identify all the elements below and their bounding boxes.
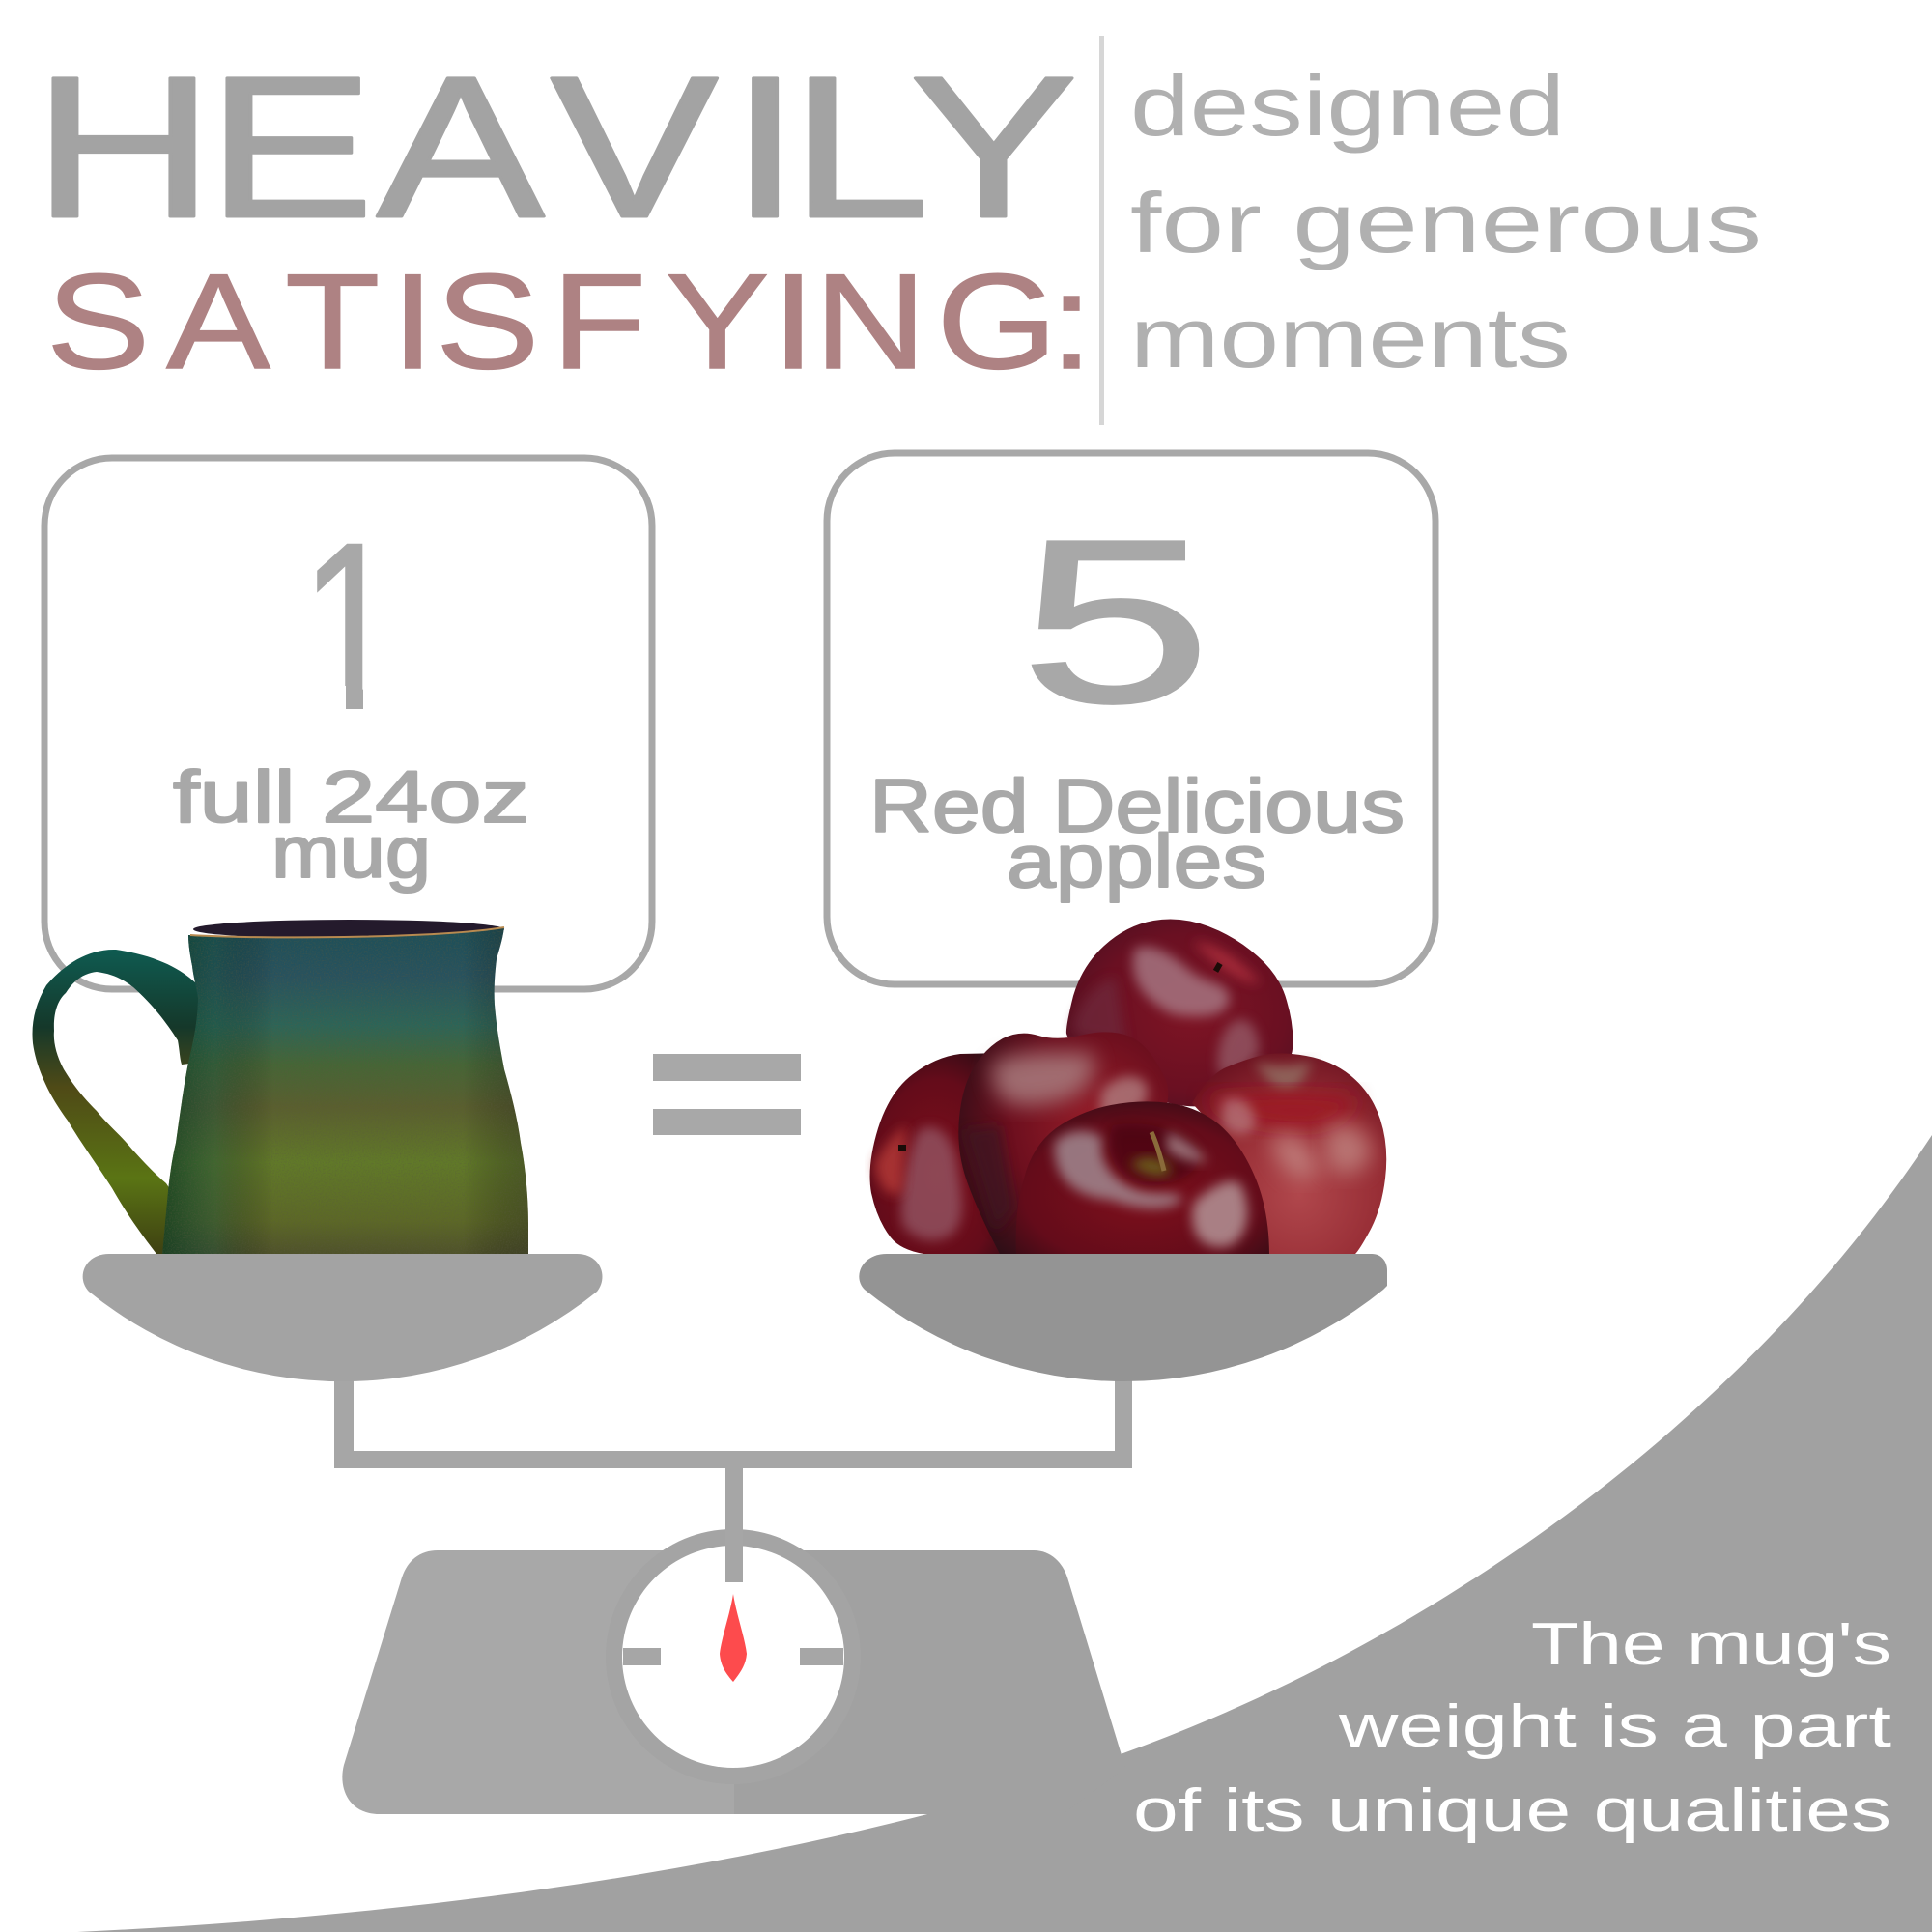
needle: [720, 1594, 747, 1682]
apple: front: [1016, 1101, 1269, 1256]
right pan: [859, 1254, 1387, 1381]
label: full 24oz mug: full 24oz: [173, 756, 529, 838]
caption: weight is a part: [1338, 1693, 1891, 1760]
title: SATISFYING: SATISFYING:: [46, 245, 1093, 397]
label: Red Delicious apples: [869, 763, 1405, 903]
dial: [606, 1468, 861, 1784]
scale: [83, 1254, 1387, 1814]
mug rim edge: [190, 927, 504, 937]
apple: back: [1066, 919, 1293, 1106]
label: Red Delicious apples: Red Delicious: [869, 763, 1405, 848]
title: HEAVILY: HEAVILY: [33, 35, 1077, 259]
dial post: [725, 1468, 743, 1582]
icon: mug: [33, 920, 528, 1254]
number 5: 5: [1020, 492, 1211, 751]
apple: left: [870, 1053, 1005, 1256]
number 1: 1: [300, 494, 401, 759]
apple: right: [1192, 1053, 1386, 1256]
label: Red Delicious apples: apples: [1007, 818, 1266, 903]
subtitle: [1130, 58, 1762, 385]
scale frame bar: [334, 1377, 1132, 1468]
label: full 24oz mug: [173, 756, 529, 894]
subtitle: designed: [1130, 58, 1565, 154]
subtitle: moments: [1130, 290, 1571, 385]
subtitle: for generous: [1130, 175, 1762, 270]
caption: The mug's: [1531, 1611, 1891, 1678]
icon: apples: [870, 919, 1386, 1256]
left pan: [83, 1254, 602, 1381]
caption: of its unique qualities: [1133, 1777, 1891, 1844]
divider: [1099, 36, 1104, 425]
apple: middle: [958, 1032, 1168, 1256]
scale base: [342, 1550, 1125, 1814]
panel: mug count: [44, 458, 652, 989]
equals sign: [653, 1054, 801, 1135]
panel: apple count: [827, 453, 1435, 984]
label: full 24oz mug: mug: [271, 811, 431, 894]
swoosh background: [77, 1135, 1932, 1932]
mug handle: [33, 950, 198, 1254]
mug body: [162, 927, 528, 1254]
mug inner rim: [193, 920, 504, 939]
caption: [1133, 1611, 1891, 1844]
